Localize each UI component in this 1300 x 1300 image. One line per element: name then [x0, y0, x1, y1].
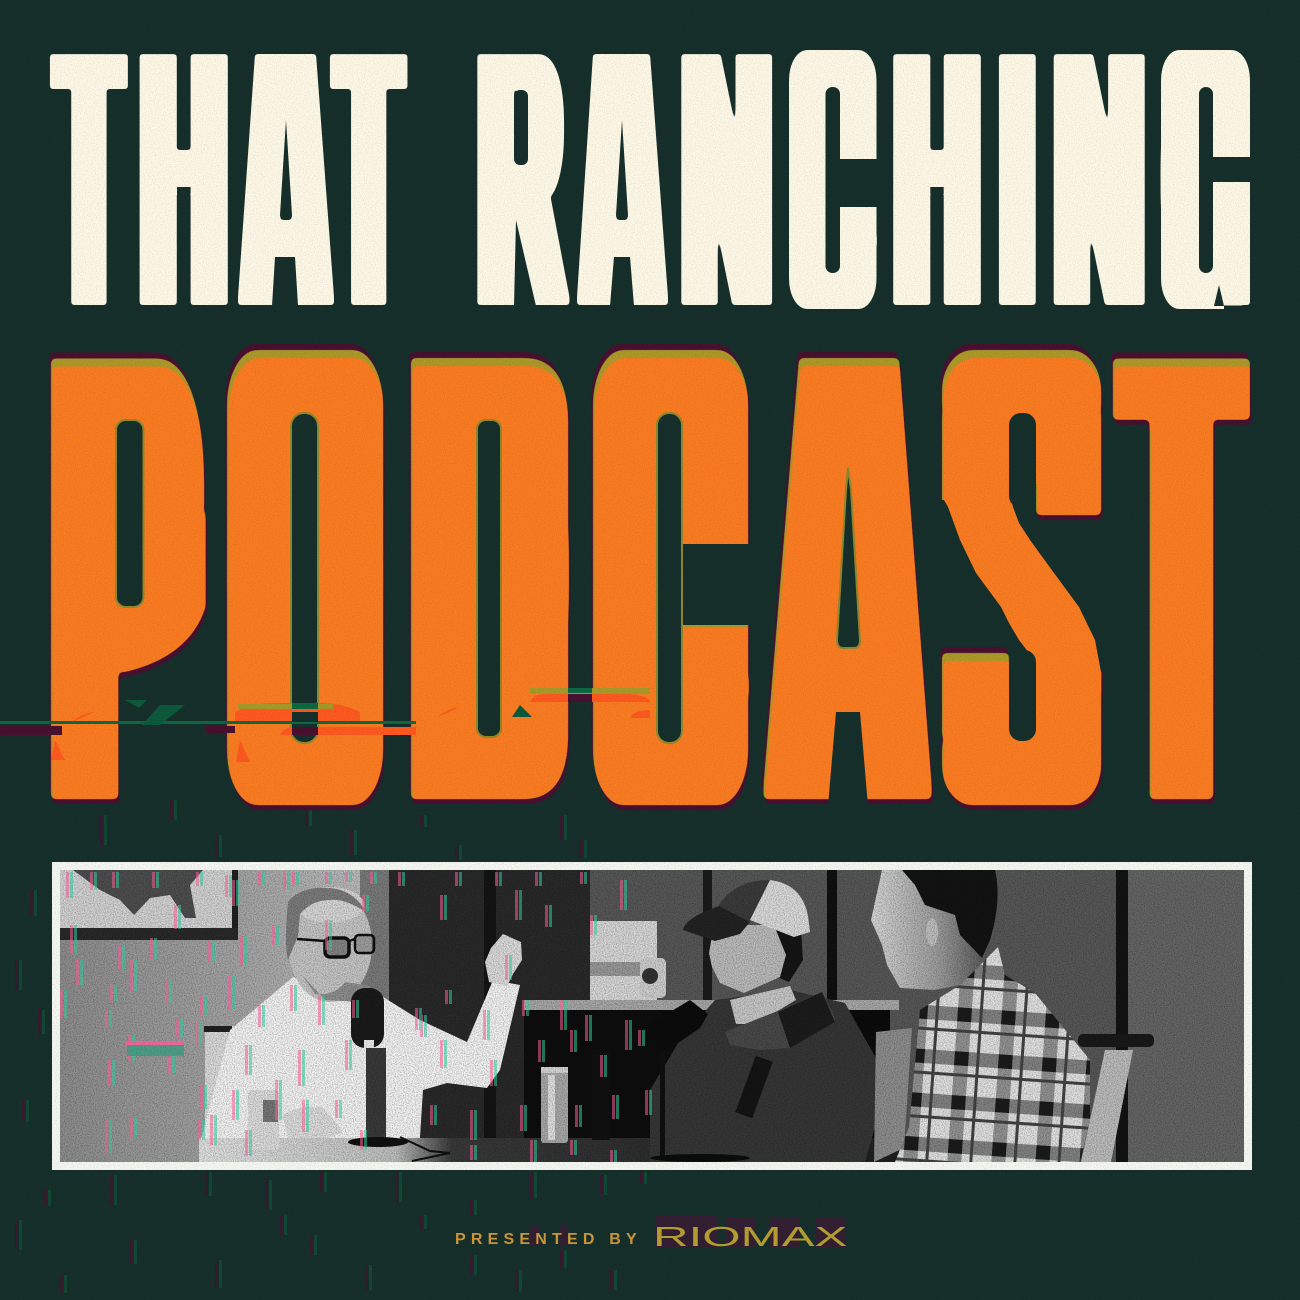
- mic and stand, man one: [348, 988, 450, 1161]
- man two: jacket: [650, 990, 880, 1162]
- right chair: [1078, 1034, 1154, 1162]
- riomax logo wordmark: RIOMAX: [653, 1222, 847, 1252]
- center drink can: [541, 1067, 568, 1143]
- man two: hair: [765, 930, 803, 982]
- podcast letters: A: [788, 230, 908, 924]
- mic stand center: [592, 1050, 610, 1140]
- photo glitch bar: [125, 1041, 184, 1056]
- photo glitch stripes: [60, 872, 652, 1162]
- photo frame: [52, 862, 1252, 1170]
- man one: hand on table: [282, 1107, 342, 1143]
- podcast letters: P: [59, 232, 190, 924]
- man one: head: [286, 887, 374, 1002]
- podcast letter openings: [683, 413, 1106, 806]
- podcast letter counters: [116, 413, 860, 743]
- title: THAT RANCHING: [61, 0, 1254, 377]
- background glitch stripes: [15, 800, 647, 1293]
- man one: shirt: [200, 977, 520, 1162]
- title letters: [61, 0, 1242, 377]
- left chair: [204, 1026, 235, 1136]
- podcast letters: S: [958, 233, 1086, 924]
- man two: face: [709, 925, 786, 993]
- middle chair: [874, 1028, 912, 1162]
- logo glitch blocks: [530, 1216, 845, 1248]
- table top: [199, 1138, 900, 1162]
- studio wall backdrop: [60, 870, 1244, 1162]
- photo grain: [60, 870, 1244, 1162]
- title letter counters: [177, 87, 1254, 312]
- shelf with poster and device: [524, 921, 899, 1150]
- podcast letters: T: [1134, 231, 1229, 924]
- photo panel with white frame: [52, 862, 1252, 1170]
- footer: presented by Riomax: [455, 1216, 847, 1252]
- wall map picture: [60, 870, 238, 940]
- presented by label: PRESENTED BY: [455, 1231, 642, 1248]
- man two: collar: [730, 986, 796, 1024]
- man three: head: [871, 870, 998, 990]
- podcast letters: O: [244, 231, 366, 924]
- podcast letters: [59, 230, 1229, 924]
- man three: plaid shirt: [895, 947, 1090, 1162]
- left drink can base: [248, 1128, 279, 1150]
- podcast terminal highlights: [684, 625, 748, 628]
- podcast title glitch bands: [0, 688, 651, 762]
- title: PODCAST: [59, 230, 1229, 924]
- podcast letters: C: [609, 232, 731, 924]
- left drink can: [248, 1090, 279, 1150]
- man one: fist: [485, 934, 522, 986]
- man two: trucker cap: [683, 880, 810, 941]
- man two: front mic: [725, 992, 835, 1118]
- left mic, man two: [640, 1000, 750, 1162]
- podcast letters: D: [421, 230, 553, 924]
